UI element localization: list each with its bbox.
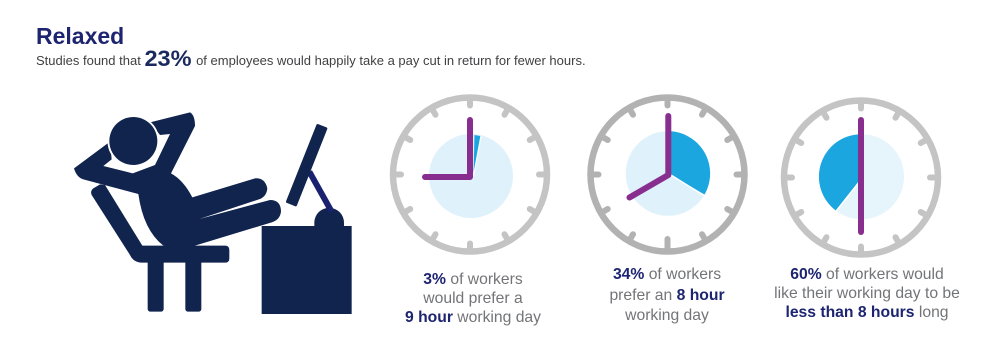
caption: 60%: less than 8 hours long xyxy=(785,304,949,321)
clock: less than 8 hours xyxy=(784,100,938,254)
subtitle with 23% statistic xyxy=(36,46,586,71)
icon: relaxed worker at desk xyxy=(74,112,352,314)
desk xyxy=(262,226,352,314)
pie: 34% xyxy=(626,131,710,216)
clock hands xyxy=(425,120,470,177)
monitor stand xyxy=(309,172,332,212)
desk dome xyxy=(314,208,344,227)
subtitle with 23% statistic: 23% xyxy=(145,46,192,71)
person head xyxy=(109,117,157,165)
subtitle with 23% statistic: Studies found that of employees would happily take a pay cut in return for fewer hours. xyxy=(36,53,586,68)
caption: 34%: 34% of workers xyxy=(613,266,721,283)
clock: 8 hour xyxy=(590,98,744,252)
caption: 60% xyxy=(774,266,960,321)
clock hand xyxy=(858,120,864,232)
monitor xyxy=(287,125,326,205)
caption: 60%: like their working day to be xyxy=(774,285,960,302)
chair xyxy=(91,184,229,312)
title: Relaxed xyxy=(36,23,124,49)
pie: 3% xyxy=(429,134,513,218)
caption: 34%: working day xyxy=(625,307,709,324)
caption: 3%: 3% of workers xyxy=(423,271,523,288)
clock hands xyxy=(630,116,668,198)
person body xyxy=(74,112,281,250)
caption: 34%: prefer an 8 hour xyxy=(609,287,725,304)
caption: 3%: would prefer a xyxy=(423,290,523,307)
caption: 60%: 60% of workers would xyxy=(790,266,944,283)
caption: 3% xyxy=(405,271,541,326)
caption: 34% xyxy=(609,266,725,324)
caption: 3%: 9 hour working day xyxy=(405,309,541,326)
clock: 9 hour xyxy=(393,98,547,252)
pie: 60% xyxy=(819,134,904,219)
